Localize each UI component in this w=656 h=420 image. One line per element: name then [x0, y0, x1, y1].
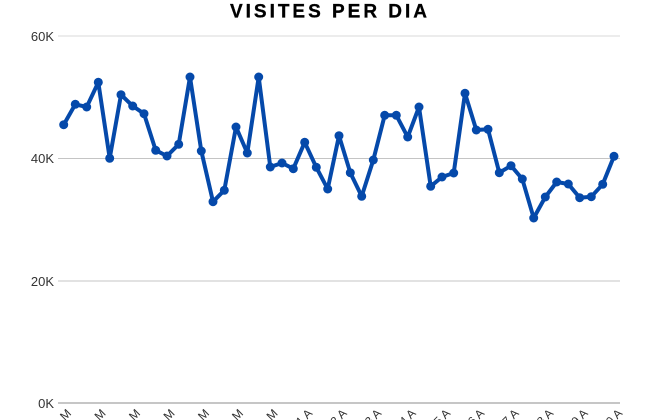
y axis labels: 20K [31, 274, 54, 289]
x axis labels [57, 406, 625, 420]
y axis labels: 0K [38, 396, 54, 411]
y axis labels [31, 29, 54, 411]
title: VISITES PER DIA [230, 2, 427, 22]
y axis labels: 40K [31, 151, 54, 166]
line chart: visits per day [59, 72, 618, 222]
y axis labels: 60K [31, 29, 54, 44]
